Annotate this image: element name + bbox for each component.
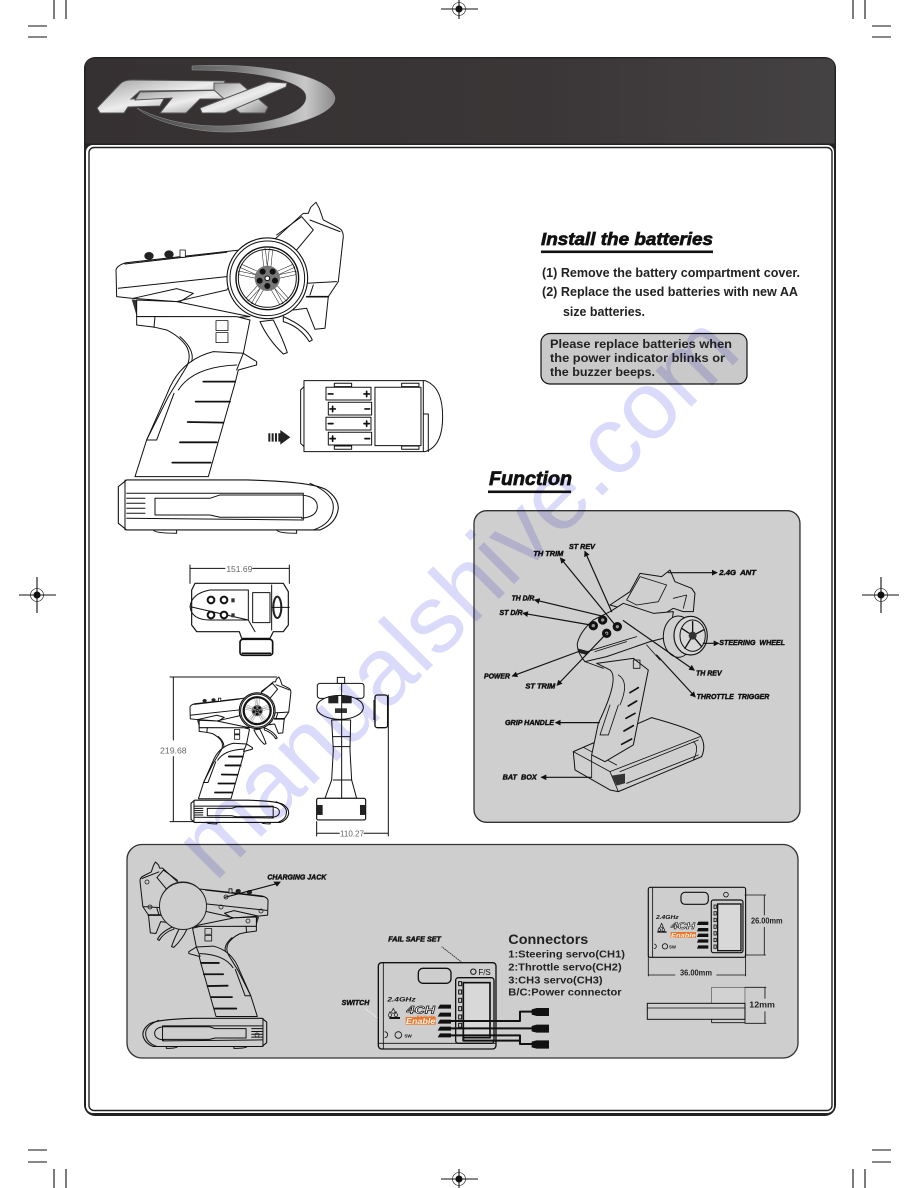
top view with width dimension (190, 564, 289, 655)
panel: receiver and connectors (127, 844, 798, 1058)
charging jack label (225, 872, 472, 1033)
receiver with wires: 2.4GHz (386, 996, 416, 1003)
function labels: POWER (484, 671, 510, 680)
battery instructions: size batteries. (563, 304, 645, 319)
receiver with wires: 4CH (405, 1004, 436, 1016)
charging jack label: CHARGING JACK (267, 872, 327, 881)
receiver with wires: Failsafe (417, 1014, 436, 1019)
panel: function diagram (474, 511, 800, 822)
function labels: ST D/R (499, 608, 523, 617)
front view with depth dimension: 110.27 (340, 829, 364, 839)
receiver with wires: F/S (478, 968, 491, 977)
receiver dimension drawing: 4CH (670, 921, 695, 931)
receiver dimension drawing (647, 887, 783, 1023)
page frame (84, 57, 836, 1116)
callout: replace batteries note: the power indicator blinks or (550, 351, 725, 365)
switch label: SWITCH (342, 998, 370, 1007)
callout: replace batteries note: the buzzer beeps. (550, 365, 655, 379)
function labels: TH REV (696, 669, 722, 678)
connectors list: Connectors (508, 931, 589, 947)
leader arrows (513, 552, 718, 777)
function labels: ST REV (569, 542, 596, 551)
function labels: TH TRIM (533, 549, 564, 558)
connectors list: 1:Steering servo(CH1) (508, 949, 625, 960)
perspective transmitter (573, 570, 707, 792)
watermark: manualshive.com (154, 294, 758, 898)
receiver with wires (378, 963, 549, 1049)
callout: replace batteries note (541, 334, 747, 384)
front view with depth dimension (317, 677, 388, 839)
function labels: THROTTLE TRIGGER (697, 692, 770, 701)
callout: replace batteries note: Please replace batteries when (550, 337, 732, 351)
receiver dimension drawing: 36.00mm (680, 969, 712, 978)
receiver with wires: Enable (406, 1017, 436, 1026)
dimensioned views (160, 564, 388, 839)
function labels: ST TRIM (525, 681, 556, 690)
connectors list: 3:CH3 servo(CH3) (508, 975, 603, 986)
function labels: GRIP HANDLE (505, 718, 555, 727)
side view with height dimension (160, 677, 291, 824)
icon: insertion arrow (268, 430, 290, 445)
side view with height dimension: 219.68 (160, 745, 187, 755)
battery instructions: (2) Replace the used batteries with new AA (542, 284, 798, 299)
receiver dimension drawing: 12mm (749, 999, 775, 1009)
function labels: 2.4G ANT (718, 568, 757, 577)
battery instructions: (1) Remove the battery compartment cover. (542, 265, 800, 280)
battery instructions (542, 265, 800, 319)
receiver dimension drawing: SW (669, 944, 677, 949)
function labels: STEERING WHEEL (719, 638, 785, 647)
function labels (484, 542, 785, 782)
receiver dimension drawing: Enable (671, 933, 696, 940)
fail safe label: FAIL SAFE SET (388, 935, 442, 944)
receiver with wires: SW (404, 1033, 412, 1038)
top view with width dimension: 151.69 (226, 564, 252, 574)
function labels: TH D/R (512, 594, 535, 603)
receiver dimension drawing: 26.00mm (751, 916, 783, 925)
heading: function: Function (489, 469, 572, 490)
header band (86, 58, 834, 144)
connectors list (508, 931, 625, 998)
rear view of transmitter (140, 862, 268, 1048)
large side view of transmitter (116, 202, 343, 533)
function labels: BAT BOX (503, 773, 537, 782)
FTX logo (97, 65, 335, 132)
receiver dimension drawing: 2.4GHz (655, 915, 679, 921)
connectors list: B/C:Power connector (508, 987, 622, 998)
connectors list: 2:Throttle servo(CH2) (508, 962, 622, 973)
heading: install the batteries: Install the batteries (541, 229, 713, 249)
battery compartment (301, 381, 443, 452)
